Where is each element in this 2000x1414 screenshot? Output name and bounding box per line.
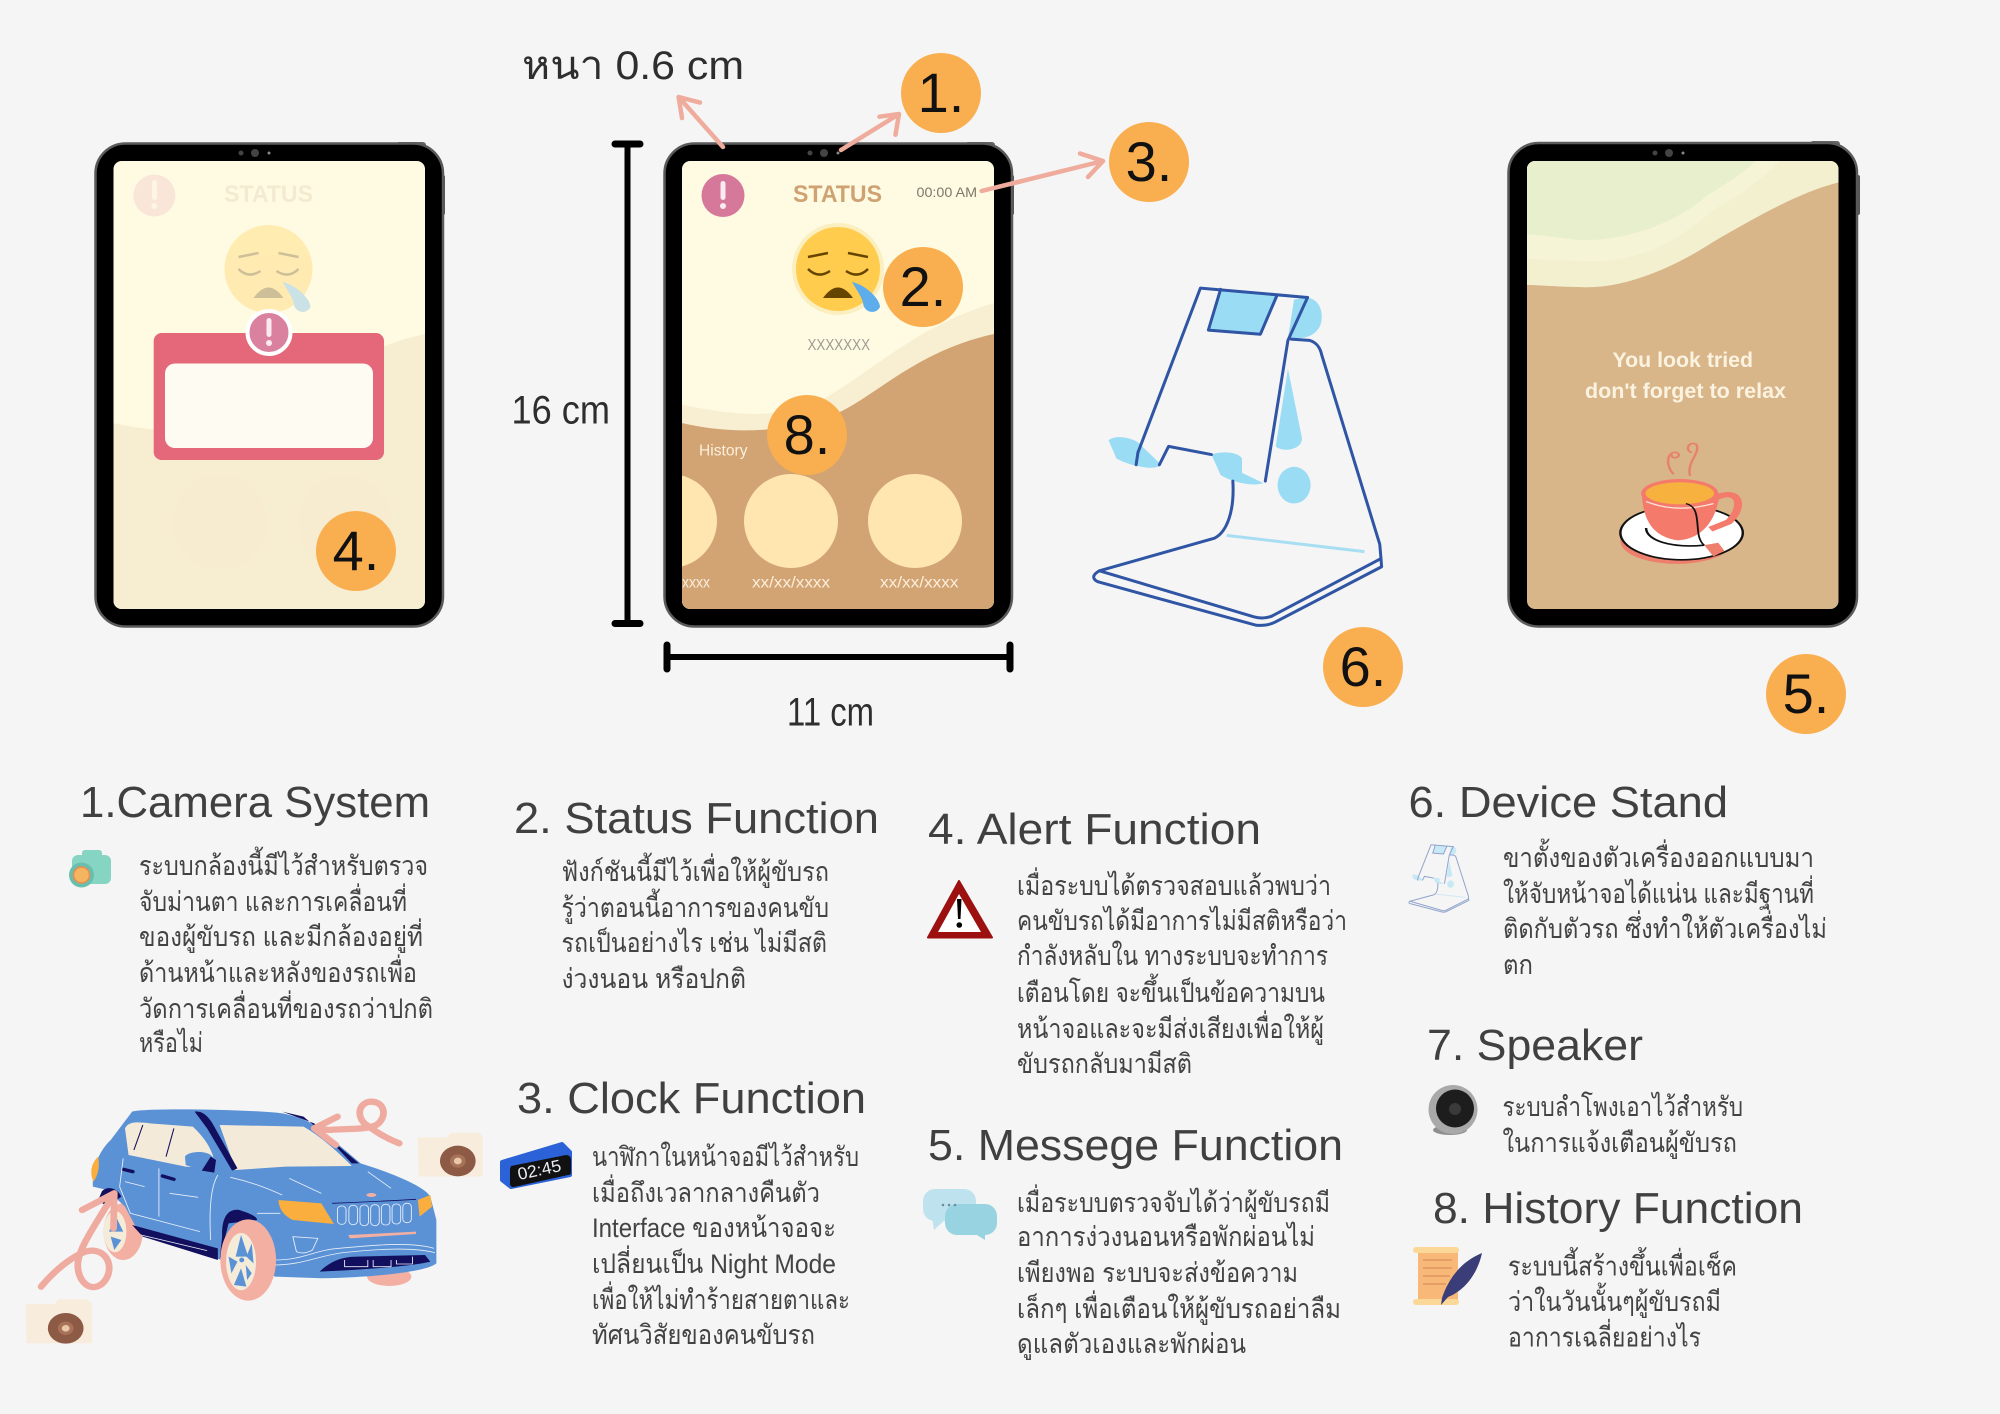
stand text: ติดกับตัวรถ ซึ่งทำให้ตัวเครื่องไม่	[1503, 910, 1827, 944]
badge 6: 6.	[1340, 635, 1386, 698]
clock text: Interface ของหน้าจอจะ	[592, 1213, 836, 1243]
icon: tea cup	[1620, 443, 1743, 564]
panel: alert function	[928, 805, 1347, 1079]
status placeholder: XXXXXXX	[808, 337, 870, 354]
tablet 4: alert screen	[96, 142, 445, 626]
camera text: วัดการเคลื่อนที่ของรถว่าปกติ	[139, 990, 433, 1024]
history circles: xx/xx/xxxx	[880, 575, 958, 592]
camera text: ของผู้ขับรถ และมีกล้องอยู่ที่	[139, 918, 423, 953]
alert text: คนขับรถได้มีอาการไม่มีสติหรือว่า	[1017, 906, 1347, 936]
heading: status function: 2. Status Function	[514, 794, 879, 843]
alert text	[1017, 867, 1347, 1079]
panel: message function	[923, 1121, 1343, 1360]
history text: ว่าในวันนั้นๆผู้ขับรถมี	[1508, 1282, 1721, 1318]
arrow: clock	[982, 154, 1103, 191]
panel: status function	[514, 794, 879, 994]
message text: เมื่อระบบตรวจจับได้ว่าผู้ขับรถมี	[1017, 1184, 1330, 1219]
alert text: ขับรถกลับมามีสติ	[1017, 1049, 1192, 1079]
heading: camera system: 1.Camera System	[80, 778, 430, 827]
badge 1: 1.	[918, 61, 964, 124]
arrow: rear camera	[41, 1193, 114, 1287]
clock label: 00:00 AM	[916, 184, 977, 200]
relax message: don't forget to relax	[1585, 380, 1786, 403]
dimension: width 11 cm: 11 cm	[787, 690, 874, 734]
status text: รถเป็นอย่างไร เช่น ไม่มีสติ	[562, 925, 827, 958]
heading: clock function: 3. Clock Function	[517, 1074, 866, 1123]
badge 5	[1766, 654, 1846, 734]
screen heading: STATUS: STATUS	[793, 181, 882, 208]
icon: camera	[69, 850, 111, 888]
alert text: เมื่อระบบได้ตรวจสอบแล้วพบว่า	[1017, 867, 1331, 901]
icon: sleepy emoji	[792, 223, 884, 315]
arrow: thickness	[679, 97, 723, 147]
icon: front camera	[418, 1133, 483, 1177]
speaker text	[1502, 1092, 1743, 1159]
clock text: เพื่อให้ไม่ทำร้ายสายตาและ	[592, 1281, 850, 1315]
heading: alert function: 4. Alert Function	[928, 805, 1261, 854]
panel: device stand	[1408, 778, 1827, 980]
icon: digital clock: 02:45	[516, 1156, 563, 1184]
clock text: เมื่อถึงเวลากลางคืนตัว	[592, 1174, 820, 1208]
history text: อาการเฉลี่ยอย่างไร	[1508, 1318, 1701, 1352]
relax message: You look tried	[1612, 349, 1753, 372]
badge 6	[1323, 627, 1403, 707]
heading: message function: 5. Messege Function	[928, 1121, 1343, 1170]
clock text: เปลี่ยนเป็น Night Mode	[592, 1245, 836, 1279]
message text: อาการง่วงนอนหรือพักผ่อนไม่	[1017, 1222, 1315, 1252]
tablet 5: message screen	[1508, 141, 1860, 626]
icon: rear camera	[26, 1299, 92, 1344]
stand text: ให้จับหน้าจอได้แน่น และมีฐานที่	[1503, 875, 1814, 910]
icon: speech bubbles	[923, 1189, 997, 1240]
history label: History	[699, 443, 748, 460]
panel: speaker	[1427, 1021, 1743, 1159]
speaker text: ในการแจ้งเตือนผู้ขับรถ	[1502, 1127, 1737, 1159]
icon: digital clock	[502, 1144, 571, 1187]
badge 3: 3.	[1126, 130, 1172, 193]
camera text: จับม่านตา และการเคลื่อนที่	[139, 883, 407, 917]
camera text: หรือไม่	[139, 1028, 203, 1058]
heading: history function: 8. History Function	[1433, 1184, 1803, 1233]
dimension: width 11 cm	[667, 645, 1010, 734]
clock text: ทัศนวิสัยของคนขับรถ	[592, 1320, 815, 1350]
icon: speaker	[1428, 1085, 1478, 1135]
status text: ฟังก์ชันนี้มีไว้เพื่อให้ผู้ขับรถ	[562, 852, 829, 888]
message text: ดูแลตัวเองและพักผ่อน	[1017, 1329, 1246, 1360]
message text: เพียงพอ ระบบจะส่งข้อความ	[1017, 1258, 1298, 1288]
icon: mini stand	[1409, 845, 1469, 912]
badge 8: 8.	[784, 403, 830, 466]
icon: scroll and quill	[1413, 1247, 1482, 1305]
message text	[1017, 1184, 1341, 1360]
heading: device stand: 6. Device Stand	[1408, 778, 1728, 827]
badge 4	[316, 511, 396, 591]
alert text: เตือนโดย จะขึ้นเป็นข้อความบน	[1017, 973, 1325, 1008]
alert dialog	[154, 311, 384, 460]
icon: warning triangle	[928, 881, 992, 938]
icon: alert	[702, 174, 744, 217]
badge 4: 4.	[333, 519, 379, 582]
panel: history function	[1413, 1184, 1803, 1352]
dimension: height 16 cm	[512, 144, 640, 624]
badge 2	[883, 247, 963, 327]
panel: camera system	[69, 778, 433, 1058]
alert text: หน้าจอและจะมีส่งเสียงเพื่อให้ผู้	[1017, 1010, 1324, 1045]
camera text: ระบบกล้องนี้มีไว้สำหรับตรวจ	[139, 846, 428, 881]
history text	[1508, 1246, 1737, 1352]
status text	[562, 852, 829, 994]
history circles: xx/xx/xxxx	[752, 575, 830, 592]
tablet 4: alert screen: STATUS	[224, 181, 313, 208]
alert text: กำลังหลับใน ทางระบบจะทำการ	[1017, 940, 1328, 971]
arrow: camera	[841, 114, 899, 150]
arrow: front camera	[314, 1102, 399, 1145]
stand text: ตก	[1503, 950, 1533, 980]
history circles: xxxx	[682, 575, 710, 592]
badge 1	[901, 53, 981, 133]
badge 8	[767, 395, 847, 475]
clock text	[592, 1141, 859, 1350]
dimension: thickness label: หนา 0.6 cm	[522, 44, 744, 88]
history text: ระบบนี้สร้างขึ้นเพื่อเช็ค	[1508, 1246, 1737, 1282]
status text: ง่วงนอน หรือปกติ	[562, 964, 746, 994]
dimension: height 16 cm: 16 cm	[512, 388, 610, 432]
stand text	[1503, 838, 1827, 980]
tablet: status screen	[623, 142, 1014, 626]
speaker text: ระบบลำโพงเอาไว้สำหรับ	[1502, 1092, 1743, 1122]
badge 5: 5.	[1783, 662, 1829, 725]
stand text: ขาตั้งของตัวเครื่องออกแบบมา	[1503, 838, 1814, 873]
status text: รู้ว่าตอนนี้อาการของคนขับ	[562, 888, 829, 924]
clock text: นาฬิกาในหน้าจอมีไว้สำหรับ	[592, 1141, 859, 1172]
history circles	[682, 474, 962, 588]
badge 2: 2.	[900, 255, 946, 318]
camera text: ด้านหน้าและหลังของรถเพื่อ	[139, 954, 417, 988]
car illustration with cameras	[26, 1102, 483, 1344]
camera text	[139, 846, 433, 1058]
message text: เล็กๆ เพื่อเตือนให้ผู้ขับรถอย่าลืม	[1017, 1290, 1341, 1325]
panel: clock function	[502, 1074, 866, 1350]
device stand	[1094, 288, 1382, 625]
heading: speaker: 7. Speaker	[1427, 1021, 1643, 1070]
relax message	[1585, 349, 1786, 403]
badge 3	[1109, 122, 1189, 202]
